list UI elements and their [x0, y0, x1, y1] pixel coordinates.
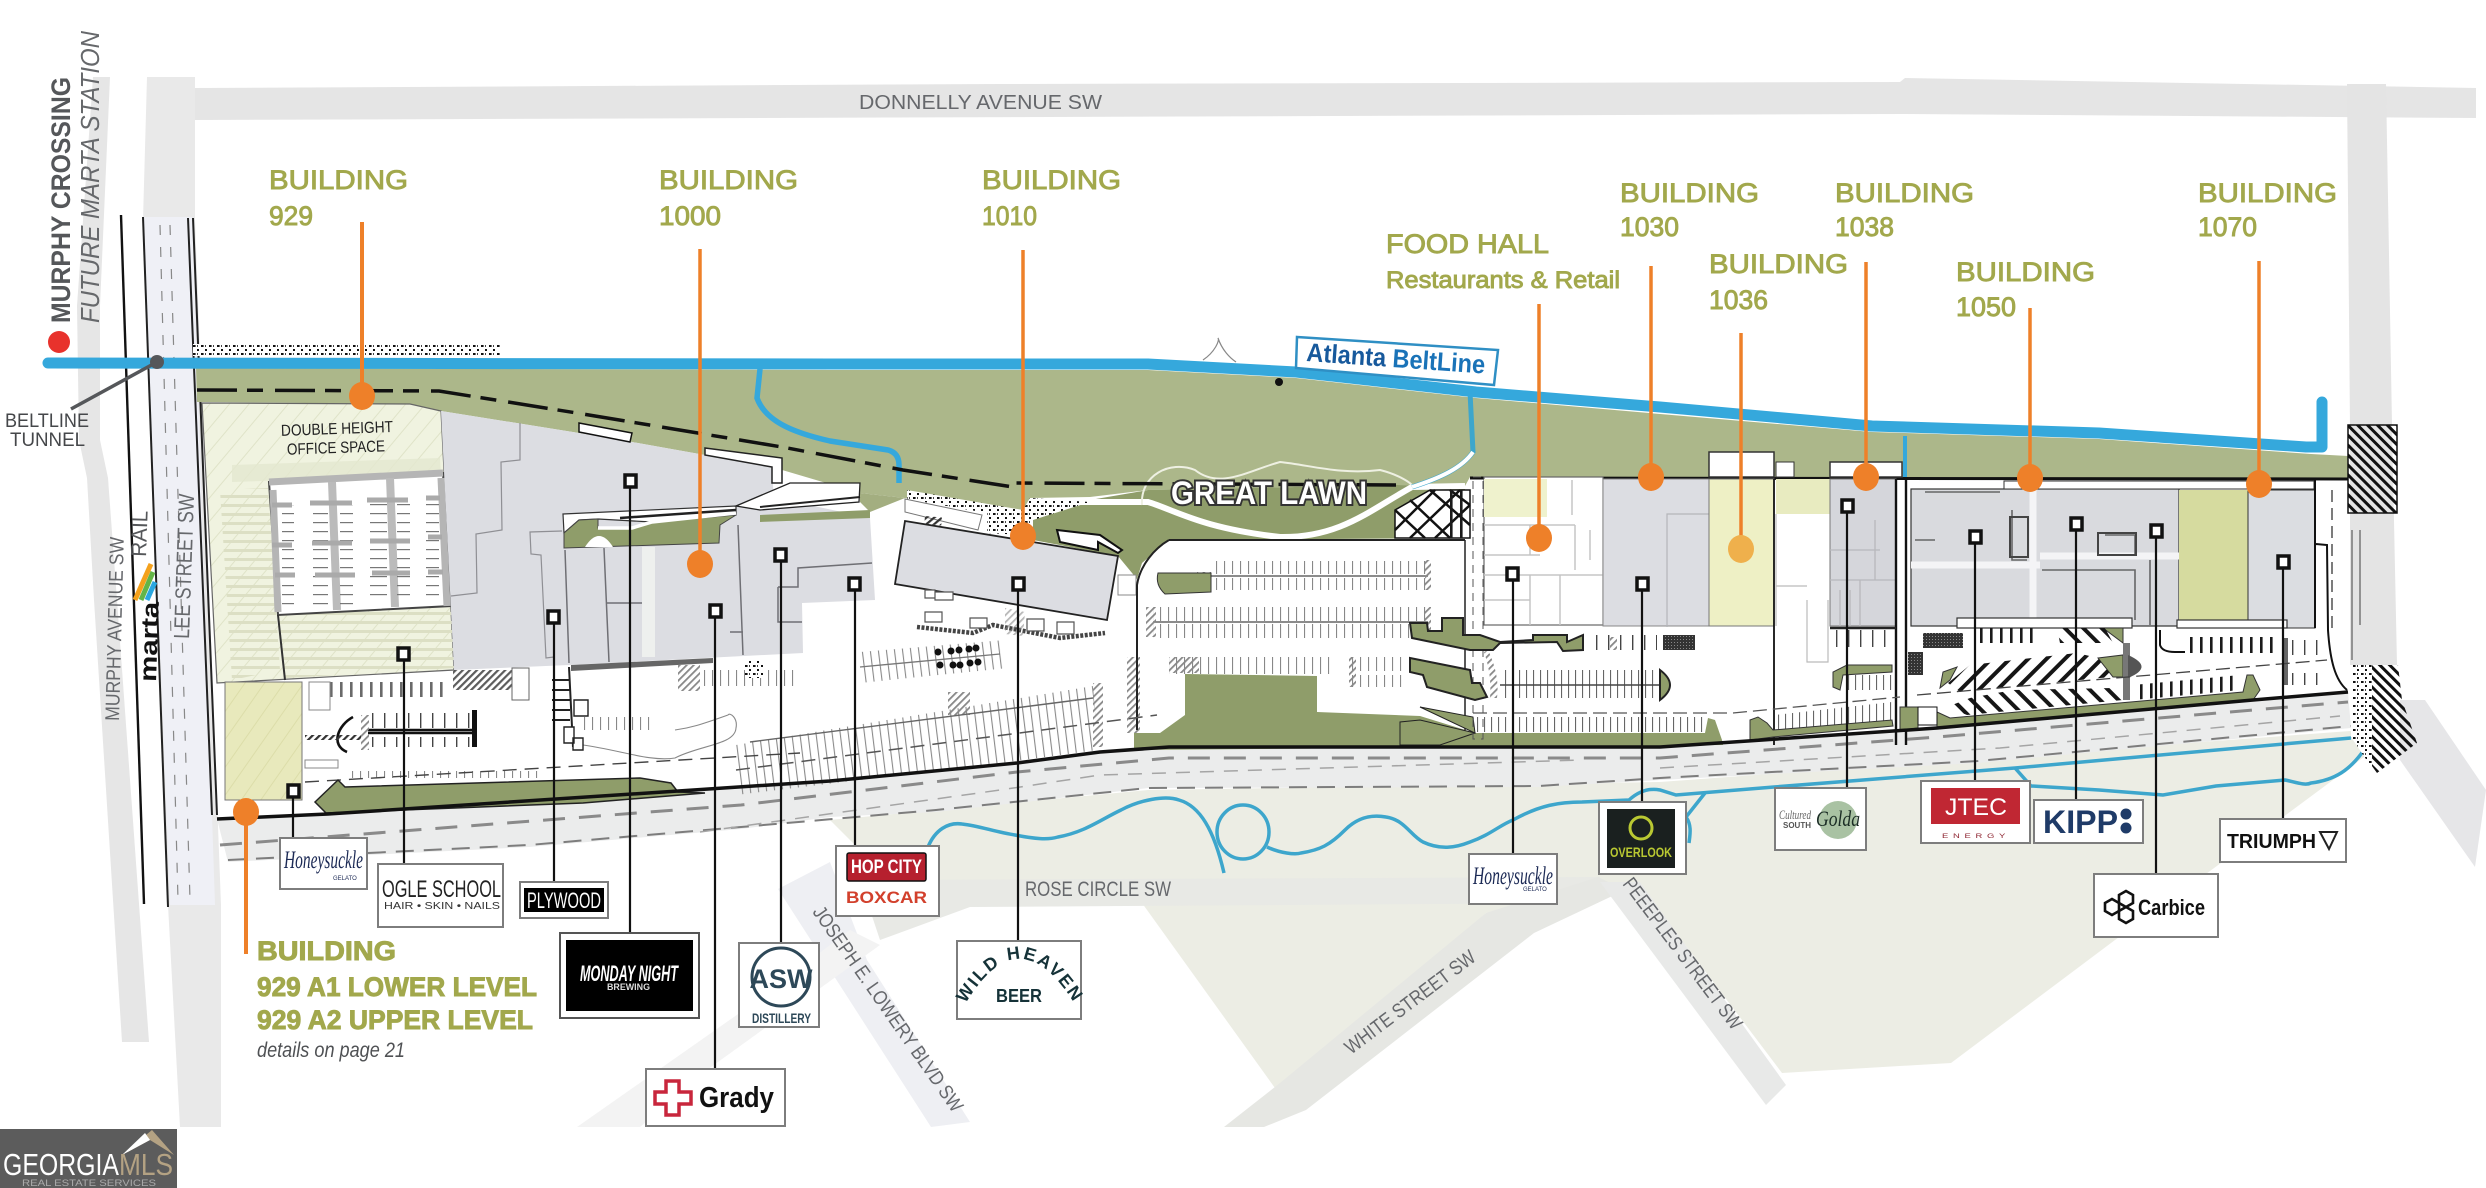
street: Joseph E. Lowery: JOSEPH E. LOWERY BLVD SW — [808, 902, 967, 1116]
logo: Triumph: TRIUMPH — [2227, 831, 2316, 853]
heading: building 1036: BUILDING — [1709, 249, 1848, 279]
orange leader: building 1000 — [687, 249, 713, 578]
heading: building 1050: BUILDING — [1956, 257, 2095, 287]
building 1038 footprint — [1830, 462, 1906, 745]
orange leader: building 1030 — [1638, 266, 1664, 491]
small green wedge beside building 1010 — [860, 493, 905, 512]
logo: Triumph — [2220, 819, 2346, 862]
orange leader: building 1038 — [1853, 262, 1879, 491]
parking lots east of food hall — [1473, 635, 1900, 732]
heading: building 929 — [269, 165, 408, 231]
street: White Street: WHITE STREET SW — [1341, 946, 1480, 1059]
building 1036 footprint — [1709, 452, 1830, 745]
MARTA rail label — [126, 510, 165, 682]
Great Lawn label: GREAT LAWN — [1171, 475, 1367, 511]
food hall footprint — [1395, 477, 1603, 739]
street: east vertical road — [2347, 84, 2397, 665]
street: Lee Street — [121, 77, 221, 1127]
Georgia MLS watermark: MLS — [119, 1147, 173, 1182]
Georgia MLS watermark: REAL ESTATE SERVICES — [22, 1178, 156, 1188]
orange leader: food hall — [1526, 304, 1552, 552]
logo: Hop City / Boxcar: HOP CITY — [851, 857, 922, 878]
street: Donnelly Avenue — [195, 78, 2476, 120]
top left speckled hatch strip — [193, 344, 500, 356]
building 1030 footprint — [1603, 479, 1709, 627]
heading: building 1030: BUILDING — [1620, 178, 1759, 208]
logo: Cultured South / Golda: SOUTH — [1783, 821, 1811, 830]
logo: JTEC Energy — [1921, 781, 2030, 843]
lattice plaza — [1395, 490, 1470, 538]
logo: KIPP — [2034, 800, 2143, 843]
heading: food hall: FOOD HALL — [1386, 229, 1549, 259]
MARTA rail label: marta — [135, 601, 165, 682]
orange leader: building 1050 — [2017, 308, 2043, 492]
Beltline trail — [48, 338, 2322, 483]
heading: building 1000: 1000 — [659, 201, 721, 231]
logo: Honeysuckle (west): GELATO — [333, 876, 357, 882]
logo: ASW Distillery: ASW — [750, 964, 813, 994]
heading: building 1030: 1030 — [1620, 212, 1679, 242]
Great Lawn paths — [1058, 392, 1473, 537]
heading: building 929: 929 — [269, 201, 313, 231]
dashed property line on the lawn — [197, 390, 1396, 487]
orange leader: building 929 — [349, 222, 375, 410]
heading: building 1038: 1038 — [1835, 212, 1894, 242]
darker green park area — [1033, 485, 1465, 579]
Beltline tunnel callout — [5, 355, 164, 451]
logo: Ogle School: HAIR • SKIN • NAILS — [384, 901, 500, 912]
logo: Ogle School: OGLE SCHOOL — [382, 876, 501, 903]
central parking lots — [948, 540, 1465, 747]
west parking T-shape — [305, 668, 529, 768]
logo: Hop City / Boxcar — [836, 846, 939, 916]
heading: building 1070: BUILDING — [2198, 178, 2337, 208]
label: double height office space: DOUBLE HEIGHT — [281, 419, 393, 440]
food hall green island north — [1410, 618, 1583, 651]
logo: Cultured South / Golda: Golda — [1816, 806, 1860, 831]
logo: Honeysuckle (east) — [1469, 854, 1557, 904]
speckled strip north of building 1010 — [907, 490, 1090, 535]
heading: building 929: BUILDING — [269, 165, 408, 195]
logo: Monday Night Brewing — [560, 933, 699, 1018]
orange leader: building 1070 — [2246, 261, 2272, 498]
MARTA rail label: RAIL — [126, 510, 153, 557]
building 1010 footprint — [895, 499, 1136, 638]
heading: building 1000 — [659, 165, 798, 231]
street: Donnelly Avenue: DONNELLY AVENUE SW — [859, 92, 1102, 114]
heading: building 929 A levels: details on page 21 — [257, 1039, 405, 1062]
orange leader: building 1036 — [1728, 333, 1754, 563]
street: Rose Circle: ROSE CIRCLE SW — [1025, 878, 1171, 901]
logo: Honeysuckle (west): Honeysuckle — [283, 847, 363, 874]
logo: Plywood — [520, 882, 608, 918]
logo: Honeysuckle (east): Honeysuckle — [1472, 863, 1553, 890]
orange leader: building 1010 — [1010, 250, 1036, 550]
west green island — [315, 778, 705, 813]
heading: building 1030 — [1620, 178, 1759, 242]
heading: building 929 A levels: 929 A1 LOWER LEVEL — [257, 972, 537, 1002]
heading: building 1010 — [982, 165, 1121, 231]
street: Peeples Street — [1600, 874, 1786, 1105]
Beltline tunnel callout: TUNNEL — [10, 430, 85, 451]
street: Joseph E. Lowery — [577, 862, 970, 1127]
Murphy Crossing station marker — [46, 31, 105, 353]
logo: Plywood: PLYWOOD — [527, 888, 601, 913]
building 1000 footprint — [441, 411, 875, 671]
logo: Cultured South / Golda — [1775, 788, 1866, 850]
street: White Street — [1224, 877, 1625, 1127]
green strips east — [1750, 628, 2260, 740]
heading: building 1050 — [1956, 257, 2095, 322]
logo: Overlook: OVERLOOK — [1610, 844, 1672, 860]
logo: Wild Heaven Beer: WILD HEAVEN — [955, 946, 1083, 1001]
street: Murphy Avenue — [77, 77, 149, 1042]
logo: Ogle School — [378, 864, 503, 927]
lots between 1000 and 1010 — [305, 640, 1157, 795]
logo: Hop City / Boxcar: BOXCAR — [846, 888, 927, 907]
Murphy Crossing station marker: FUTURE MARTA STATION — [75, 31, 105, 323]
heading: building 1036 — [1709, 249, 1848, 315]
logo: Monday Night Brewing: BREWING — [607, 982, 650, 992]
logo: ASW Distillery — [739, 943, 819, 1027]
blue walking trail — [928, 738, 2364, 873]
solid north boundary — [1470, 478, 2348, 479]
green island north of south lawn — [1400, 707, 1475, 745]
logo: Carbice: Carbice — [2138, 895, 2205, 920]
Georgia MLS watermark: GEORGIA — [3, 1147, 119, 1182]
logo: Honeysuckle (west) — [280, 838, 367, 889]
heading: food hall — [1386, 229, 1620, 294]
green lawn along Beltline — [196, 368, 2348, 510]
street: Murphy Avenue: MURPHY AVENUE SW — [102, 537, 129, 721]
logo: Honeysuckle (east): GELATO — [1523, 887, 1547, 893]
1050 parking — [1908, 628, 2327, 725]
logo: Overlook — [1599, 802, 1686, 874]
heading: building 1038 — [1835, 178, 1974, 242]
heading: building 1070 — [2198, 178, 2337, 242]
logo: Wild Heaven Beer: BEER — [996, 986, 1042, 1006]
street: Lee Street: LEE STREET SW — [169, 493, 199, 639]
street: Peeples Street: PEEEPLES STREET SW — [1618, 874, 1746, 1034]
south boundary black line — [217, 692, 2348, 819]
logo: Cultured South / Golda: Cultured — [1779, 807, 1811, 822]
heading: building 929 A levels: 929 A2 UPPER LEVEL — [257, 1005, 533, 1035]
heading: building 1010: BUILDING — [982, 165, 1121, 195]
Murphy Crossing station marker: MURPHY CROSSING — [46, 77, 76, 323]
logo: Monday Night Brewing: MONDAY NIGHT — [580, 961, 679, 986]
tenant leader lines and markers — [288, 475, 2289, 1069]
Georgia MLS watermark — [0, 1129, 177, 1188]
logo: JTEC Energy: JTEC — [1945, 794, 2007, 821]
logo: ASW Distillery: DISTILLERY — [752, 1010, 811, 1026]
road band along the south of the site — [217, 692, 2351, 862]
large green south lawn — [1134, 674, 1723, 750]
heading: building 1010: 1010 — [982, 201, 1037, 231]
street: Rose Circle — [860, 877, 1600, 940]
heading: building 1036: 1036 — [1709, 285, 1768, 315]
heading: building 1000: BUILDING — [659, 165, 798, 195]
heading: building 929 A levels: BUILDING — [257, 936, 396, 966]
building 929 A yellow block — [225, 682, 302, 800]
label: office space second line: OFFICE SPACE — [287, 438, 385, 459]
heading: building 1038: BUILDING — [1835, 178, 1974, 208]
orange leader: building 929 A — [233, 798, 259, 954]
logo: Grady: Grady — [699, 1082, 774, 1114]
street: south-east diagonal road — [2400, 700, 2486, 867]
heading: food hall: Restaurants & Retail — [1386, 267, 1620, 294]
building 1050 footprint — [1911, 481, 2314, 628]
Atlanta BeltLine sign: Atlanta BeltLine — [1306, 337, 1486, 379]
island: central green — [1157, 573, 1211, 594]
building 1070 footprint — [2177, 480, 2360, 690]
logo: Grady — [646, 1069, 785, 1126]
heading: building 1070: 1070 — [2198, 212, 2257, 242]
logo: KIPP: KIPP — [2043, 804, 2118, 840]
building 929 footprint — [202, 403, 454, 683]
logo: Carbice — [2094, 874, 2218, 937]
food hall green island south — [1410, 658, 1487, 700]
hatched parcels on the east edge — [2348, 425, 2417, 773]
heading: building 1050: 1050 — [1956, 292, 2016, 322]
logo: JTEC Energy: ENERGY — [1942, 834, 2010, 840]
heading: building 929 A levels — [257, 936, 537, 1062]
Beltline tunnel callout: BELTLINE — [5, 411, 89, 432]
sage ground south of site — [830, 730, 2364, 1095]
